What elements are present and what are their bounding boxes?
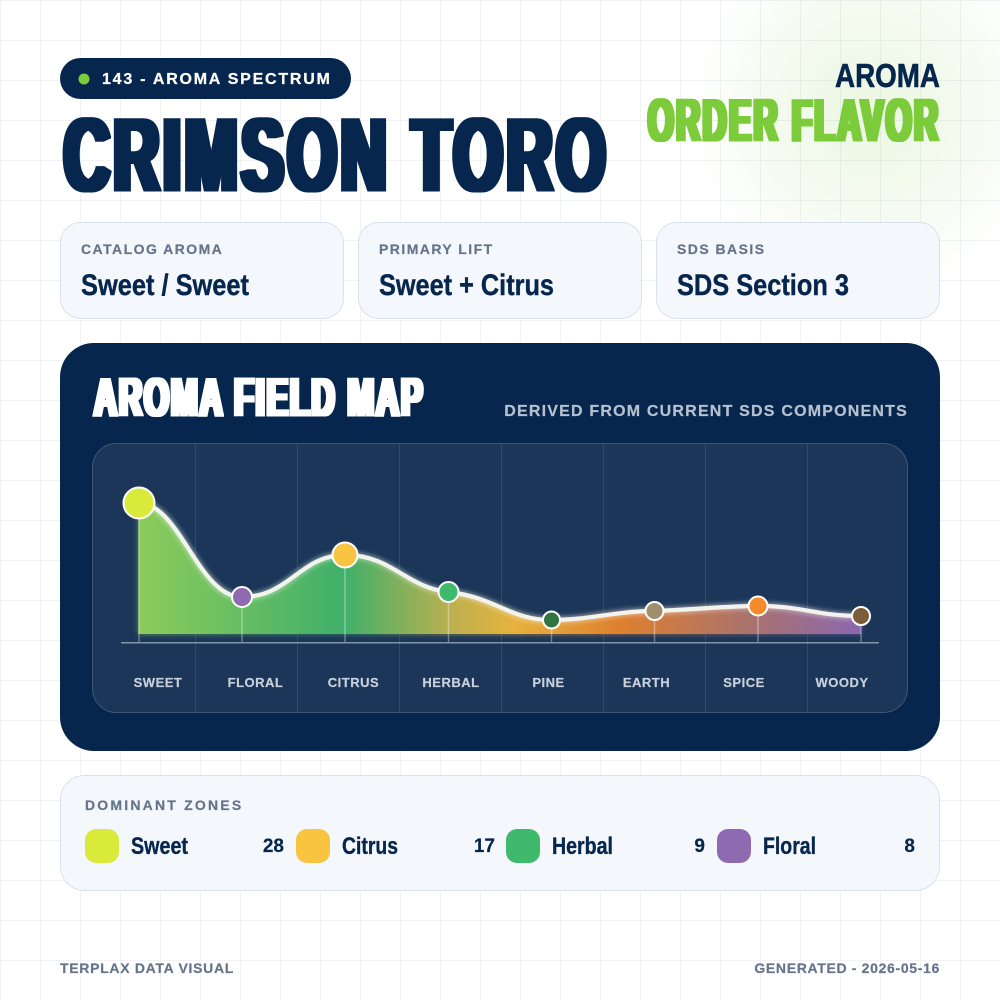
category: order flavor: ORDER FLAVOR xyxy=(648,88,940,155)
legend: floral: 8 xyxy=(904,836,915,857)
category: aroma label: AROMA xyxy=(835,57,940,94)
panel: primary lift xyxy=(358,222,642,318)
axis labels: SPICE xyxy=(723,675,765,690)
panel: sds basis xyxy=(656,222,940,318)
axis labels: PINE xyxy=(532,675,565,690)
marker: floral xyxy=(232,587,252,607)
panel: sds basis: SDS BASIS xyxy=(677,241,766,257)
panel: dominant zones xyxy=(60,776,940,890)
legend: citrus xyxy=(296,829,495,863)
legend: herbal xyxy=(506,829,705,863)
panel: primary lift: PRIMARY LIFT xyxy=(379,241,494,257)
subheading: source: DERIVED FROM CURRENT SDS COMPONENTS xyxy=(504,403,908,420)
panel: sds basis: SDS Section 3 xyxy=(677,269,849,302)
axis labels xyxy=(134,675,869,690)
panel: catalog aroma: Sweet / Sweet xyxy=(81,269,249,302)
axis labels: WOODY xyxy=(815,675,869,690)
marker: herbal xyxy=(438,582,458,602)
title: CRIMSON TORO xyxy=(64,98,609,214)
panel: aroma field map xyxy=(60,343,940,751)
axis labels: SWEET xyxy=(134,675,182,690)
axis labels: EARTH xyxy=(623,675,670,690)
heading: aroma field map: AROMA FIELD MAP xyxy=(94,366,424,428)
badge: aroma spectrum xyxy=(60,58,351,99)
marker: pine xyxy=(543,612,560,628)
footer: generated date: GENERATED - 2026-05-16 xyxy=(754,960,940,976)
marker: spice xyxy=(748,596,768,616)
panel: catalog aroma: CATALOG AROMA xyxy=(81,241,223,257)
axis labels: HERBAL xyxy=(422,675,480,690)
chart: aroma field xyxy=(92,444,908,712)
badge: aroma spectrum: 143 - AROMA SPECTRUM xyxy=(102,71,332,88)
legend: citrus: 17 xyxy=(474,836,495,857)
marker: woody xyxy=(852,607,870,625)
legend: sweet: Sweet xyxy=(131,833,188,860)
legend: herbal: 9 xyxy=(694,836,705,857)
panel: primary lift: Sweet + Citrus xyxy=(379,269,554,302)
panel: catalog aroma xyxy=(60,222,344,318)
footer: source: TERPLAX DATA VISUAL xyxy=(60,960,234,976)
legend: sweet: 28 xyxy=(263,836,284,857)
axis labels: CITRUS xyxy=(328,675,379,690)
marker: sweet xyxy=(124,488,154,518)
axis labels: FLORAL xyxy=(228,675,283,690)
legend: herbal: Herbal xyxy=(552,833,613,860)
legend: floral xyxy=(717,829,915,863)
legend: sweet xyxy=(85,829,284,863)
heading: dominant zones: DOMINANT ZONES xyxy=(85,797,243,813)
legend: floral: Floral xyxy=(763,833,816,860)
marker: citrus xyxy=(332,542,358,568)
legend: citrus: Citrus xyxy=(342,833,398,860)
marker: earth xyxy=(646,602,664,620)
